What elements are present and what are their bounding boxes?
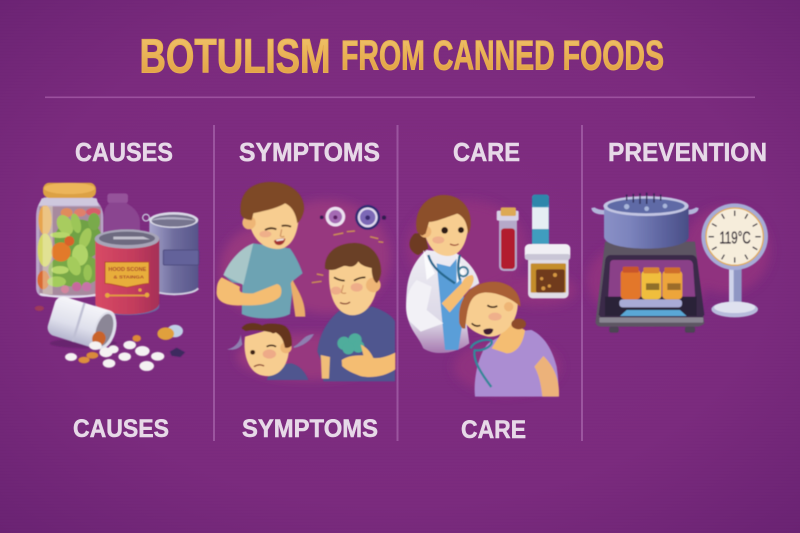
glass jar (36, 196, 103, 297)
red can (95, 229, 159, 315)
stove (596, 242, 704, 333)
child with dizziness (227, 323, 314, 380)
column headings: SYMPTOMS (239, 137, 380, 167)
can label: HOOD SCONE (108, 267, 147, 273)
thermometer gauge (701, 203, 768, 317)
patient (459, 282, 559, 397)
blurry vision eyes icon (312, 205, 386, 283)
blue sample tube (532, 195, 549, 251)
panel: symptoms illustration (217, 182, 395, 381)
column headings: PREVENTION (608, 137, 767, 167)
faded bottle (104, 193, 140, 236)
pills (35, 306, 185, 371)
panel: prevention illustration (587, 193, 770, 333)
bottom labels: CARE (461, 416, 526, 444)
title (140, 30, 664, 84)
panel: care illustration (406, 195, 577, 397)
specimen jar (525, 244, 570, 298)
jars in canner (621, 267, 682, 299)
column headings: CAUSES (75, 137, 173, 167)
pink glow (220, 200, 390, 380)
child with stomach pain (317, 243, 395, 381)
thermometer gauge: 119°C (719, 228, 751, 248)
can label (105, 262, 149, 287)
jar contents (37, 205, 102, 293)
gauge ticks (709, 211, 761, 263)
doctor (406, 195, 479, 353)
pot of boiling water (591, 193, 699, 249)
column headings: CARE (453, 137, 520, 167)
bottom labels (73, 415, 526, 444)
bottom labels: SYMPTOMS (242, 415, 378, 443)
blood sample tube (497, 207, 519, 271)
title: BOTULISM (140, 30, 330, 84)
jar lid (43, 183, 96, 198)
title divider (45, 96, 755, 98)
grey can (143, 212, 199, 294)
child with sore throat (217, 182, 305, 318)
spilled pill bottle (45, 294, 121, 353)
panel: causes illustration (35, 183, 199, 371)
pink glow (587, 207, 770, 320)
shirt emblem (337, 333, 364, 354)
column headings (75, 137, 767, 167)
bottom labels: CAUSES (73, 415, 169, 443)
pink glow (407, 200, 577, 393)
can label: & STAINGA (113, 274, 144, 280)
column dividers (213, 125, 583, 441)
